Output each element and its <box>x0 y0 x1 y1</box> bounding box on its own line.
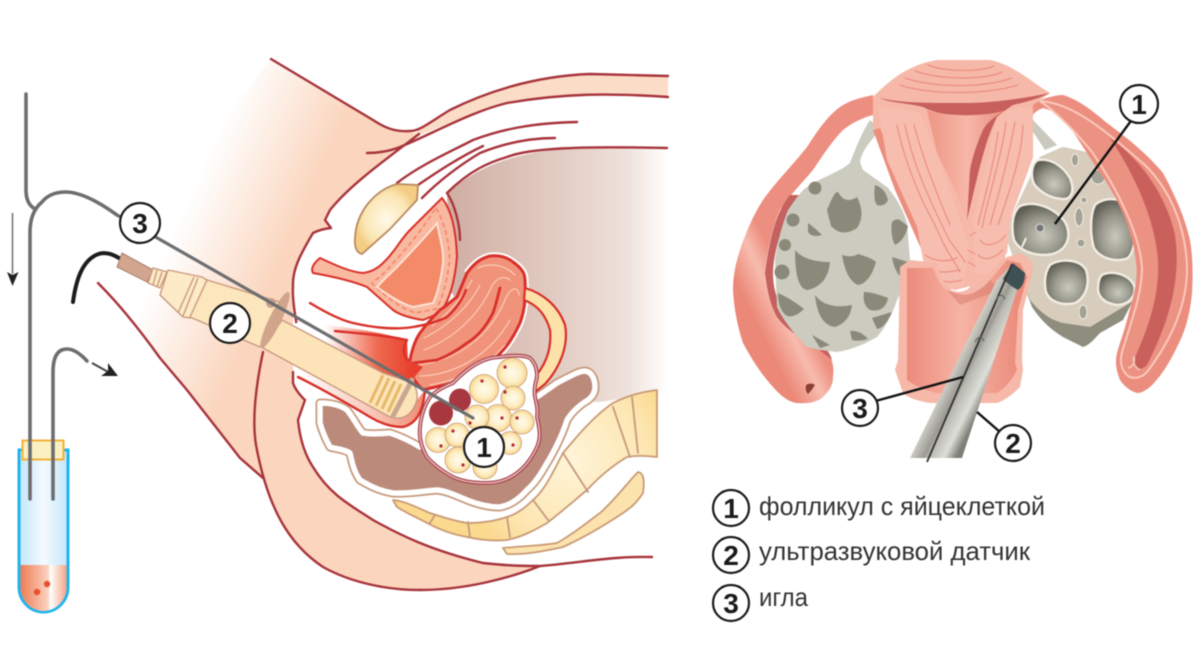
marker 3 right: 3 <box>852 393 868 424</box>
left uterine wall <box>873 128 925 253</box>
sacrum <box>393 390 657 540</box>
ovary capsule <box>420 356 540 483</box>
abdominal wall band <box>400 75 668 146</box>
vaginal fornix <box>290 322 423 382</box>
legend item 3 <box>713 582 808 621</box>
frontal reproductive organs <box>733 60 1193 462</box>
marker 1 left <box>464 427 504 467</box>
tube tip fold <box>1128 356 1140 370</box>
left ovary follicle cavities <box>774 182 908 348</box>
egg in follicle <box>1022 224 1044 247</box>
legend item 1: фолликул с яйцеклеткой <box>759 491 1045 521</box>
left tube inner band <box>765 195 832 360</box>
needle feed tube with branch <box>26 94 117 499</box>
probe connector <box>117 253 153 282</box>
legend item 2: ультразвуковой датчик <box>759 536 1031 566</box>
collected eggs <box>34 581 50 595</box>
uterus halo <box>453 256 525 383</box>
probe handle <box>190 280 283 347</box>
right ovary shadow <box>1007 147 1138 347</box>
right ovary stem <box>1033 120 1057 150</box>
ultrasound probe <box>73 253 417 418</box>
probe transducer bands <box>370 375 401 412</box>
marker 1 right: 1 <box>1131 89 1147 120</box>
skin <box>98 59 540 590</box>
vaginal probe <box>910 263 1025 458</box>
right tube pale lumen <box>1040 101 1187 378</box>
needle line <box>927 264 1012 462</box>
probe tip ring <box>393 380 412 416</box>
vaginal wall top <box>310 290 466 360</box>
legend item 3: 3 <box>723 588 739 619</box>
follicles <box>426 358 534 479</box>
uterine cavity centre <box>927 110 1007 220</box>
probe shaft <box>263 320 417 418</box>
marker 1 right <box>1120 85 1158 123</box>
bladder <box>312 198 457 320</box>
right ovary body <box>1007 147 1139 327</box>
left fallopian tube <box>733 95 873 403</box>
legend <box>713 490 1045 621</box>
marker 1 left: 1 <box>476 432 492 463</box>
marker 2 left: 2 <box>222 308 238 339</box>
muscle fibres <box>897 122 1023 282</box>
flow arrow down <box>7 213 18 286</box>
leader lines <box>872 110 1139 432</box>
abdominal cavity shading <box>447 147 667 402</box>
probe cable <box>73 253 119 302</box>
ovary capsule inner line <box>420 356 540 483</box>
vaginal canal interior <box>907 260 1027 393</box>
uterine cavity dark band <box>880 93 1050 220</box>
pubic bone <box>355 184 418 254</box>
right tube dark band <box>1110 138 1177 369</box>
marker 2 right: 2 <box>1005 428 1021 459</box>
aspiration needle <box>117 215 473 418</box>
marker 2 right <box>995 425 1031 461</box>
lower vaginal wall <box>295 365 425 427</box>
uterus <box>410 256 525 390</box>
rectum rim <box>320 371 595 507</box>
aspirated fluid <box>20 565 66 611</box>
uterine muscle lines <box>418 265 519 385</box>
probe cone <box>160 270 207 318</box>
right fallopian tube <box>1033 95 1193 393</box>
marker 3 left <box>120 203 160 243</box>
left ovary <box>775 120 910 352</box>
uterine cavity <box>413 288 500 363</box>
legend item 2: 2 <box>723 540 739 571</box>
needle guides <box>975 295 1005 342</box>
test tube glass <box>19 450 68 612</box>
vertebra divisions <box>430 397 638 537</box>
marker 2 left <box>210 303 250 343</box>
uterus body <box>873 60 1050 290</box>
probe ribs <box>148 268 167 288</box>
body outline <box>98 59 668 590</box>
right ovary follicle cavities <box>1012 160 1135 305</box>
vaginal canal wall <box>895 253 1033 403</box>
stopper <box>22 440 64 460</box>
marker 3 left: 3 <box>132 208 148 239</box>
peritoneal lines <box>397 122 667 240</box>
vaginal probe tip <box>1003 263 1025 290</box>
left muscle wall <box>878 107 970 290</box>
needle guide knob <box>266 298 276 308</box>
legend item 1 <box>713 490 1045 526</box>
marker 3 right <box>842 390 878 426</box>
right muscle wall <box>973 107 1033 277</box>
probe collar <box>256 290 294 350</box>
egg cells <box>439 365 519 467</box>
pelvic section <box>98 59 668 590</box>
aspirated follicles <box>429 388 471 426</box>
lower vaginal wall outline <box>298 377 425 427</box>
small follicles <box>1072 154 1105 319</box>
left tube opening <box>806 384 815 394</box>
legend item 1: 1 <box>723 493 739 524</box>
fallopian tube loop <box>524 288 566 392</box>
legend item 2 <box>713 536 1031 573</box>
coccyx <box>503 472 644 554</box>
cervix shade <box>947 280 1000 305</box>
test tube assembly <box>19 349 87 612</box>
bladder wall lace <box>372 208 449 313</box>
ovary <box>420 356 540 483</box>
legend item 3: игла <box>759 582 808 612</box>
flow arrow out <box>92 363 118 376</box>
outlet tube <box>53 349 87 499</box>
rectum <box>320 371 595 507</box>
bladder cavity <box>377 223 443 307</box>
fundus fibres <box>900 65 1018 92</box>
